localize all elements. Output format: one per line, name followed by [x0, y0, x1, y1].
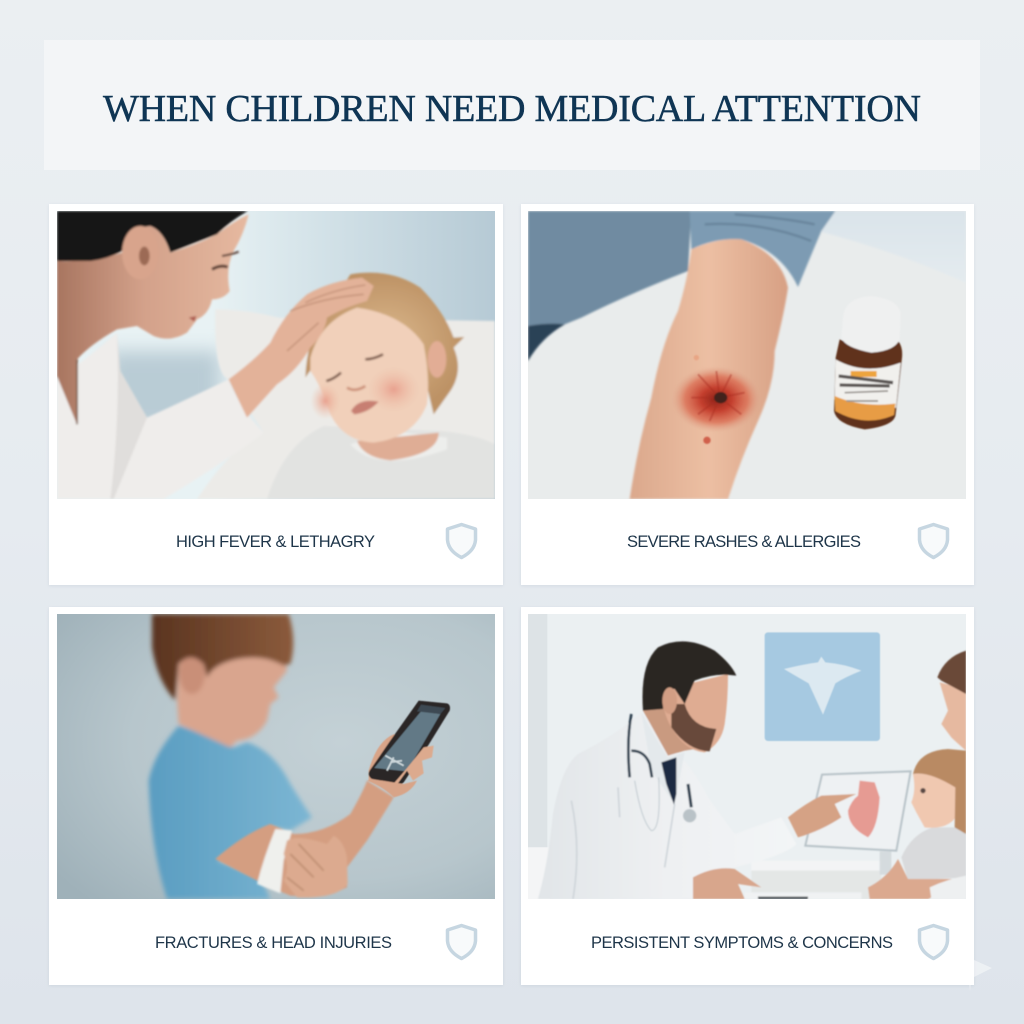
phone fingers: [390, 746, 434, 794]
title: WHEN CHILDREN NEED MEDICAL ATTENTION: [103, 88, 921, 130]
label: FRACTURES & HEAD INJURIES: [155, 934, 392, 952]
mother face: [940, 682, 966, 751]
rash: [671, 355, 761, 444]
panel: persistent symptoms and concerns: [521, 607, 974, 985]
child hair: [305, 273, 464, 414]
supporting hand: [284, 836, 348, 898]
photo: doctor showing heart on tablet to mother and child: [528, 614, 966, 899]
child dress: [901, 827, 966, 881]
sparkle: [970, 960, 992, 988]
heart: [848, 781, 880, 837]
child hair: [913, 749, 966, 834]
pointing hand: [788, 794, 856, 837]
doctor ear: [662, 687, 677, 714]
photo: rash on arm with medicine bottle: [528, 211, 966, 499]
background bed edge: [818, 211, 966, 283]
tie: [661, 757, 676, 805]
child face: [911, 774, 961, 828]
desk: [751, 861, 881, 871]
doctor coat: [538, 712, 796, 899]
boy shirt: [149, 726, 312, 899]
arm: [630, 239, 788, 499]
title banner: [44, 40, 980, 170]
boy hair: [152, 614, 293, 701]
child face: [310, 308, 428, 443]
child arm: [868, 859, 958, 899]
doctor hair: [642, 641, 736, 711]
stethoscope: [628, 714, 696, 831]
child shirt: [267, 426, 495, 499]
wall poster: [765, 632, 880, 741]
mother hair: [937, 651, 966, 694]
pillow: [197, 309, 495, 499]
child neck: [357, 433, 439, 460]
panel: severe rashes and allergies: [521, 204, 974, 585]
papers: [745, 892, 861, 899]
icon: shield: [446, 522, 478, 560]
sleeve: [690, 211, 835, 287]
label: SEVERE RASHES & ALLERGIES: [627, 533, 861, 551]
photo: boy with bandaged arm and phone: [57, 614, 495, 899]
photo: mother checking feverish child: [57, 211, 495, 499]
doctor face: [661, 674, 728, 752]
icon: shield: [446, 924, 478, 960]
boy face and neck: [177, 644, 287, 747]
mother sleeve: [930, 876, 966, 899]
mother blouse: [57, 333, 264, 499]
medicine bottle: [834, 296, 902, 429]
mother ear: [122, 226, 159, 279]
phone back hand: [369, 734, 397, 787]
arms: [215, 781, 394, 896]
boy ear: [179, 654, 205, 694]
panel: high fever and lethargy: [49, 204, 503, 585]
label: HIGH FEVER & LETHAGRY: [176, 533, 375, 551]
bandage: [257, 829, 292, 893]
doctor beard: [671, 704, 716, 751]
lower hand: [693, 868, 761, 899]
phone: [369, 701, 450, 785]
icon: shield: [918, 924, 950, 960]
tablet: [805, 771, 911, 875]
body in blue shirt: [528, 211, 691, 361]
mother face and neck: [57, 214, 249, 424]
doctor neck and shirt: [641, 712, 685, 804]
panel: fractures and head injuries: [49, 607, 503, 985]
icon: shield: [918, 522, 950, 560]
mother hair: [57, 211, 248, 261]
child ear: [428, 341, 446, 378]
mother hand on forehead: [229, 278, 374, 418]
label: PERSISTENT SYMPTOMS & CONCERNS: [591, 934, 893, 952]
